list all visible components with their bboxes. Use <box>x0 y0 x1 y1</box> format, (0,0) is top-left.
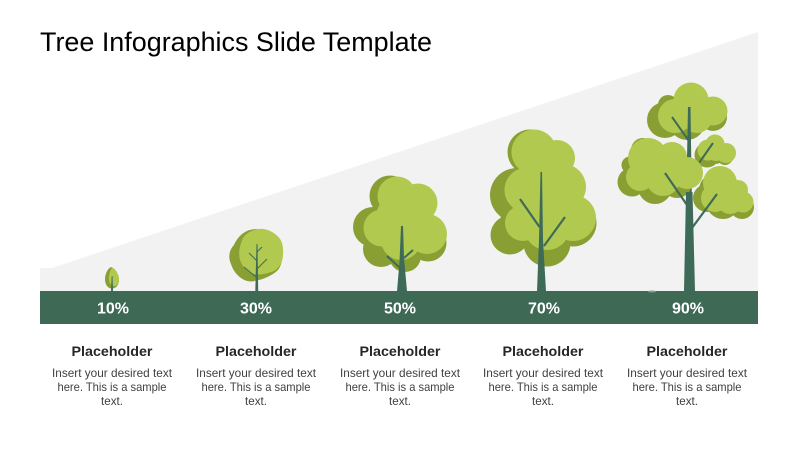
column 5: here. This is a sample <box>632 380 742 394</box>
tree 70%: large tree <box>490 130 596 291</box>
column 5 <box>627 300 748 408</box>
column 3: text. <box>389 394 411 408</box>
column 1 <box>52 300 173 408</box>
column 5: text. <box>676 394 698 408</box>
crown: lower right <box>693 166 754 219</box>
column 5: 90% <box>672 300 704 318</box>
title: Tree Infographics Slide Template <box>40 27 432 57</box>
column 3: here. This is a sample <box>346 380 455 394</box>
column 1: Placeholder <box>72 343 153 359</box>
column 5: Insert your desired text <box>627 366 748 380</box>
crown: top <box>647 82 728 140</box>
column 4: 70% <box>528 300 560 318</box>
column 1: 10% <box>97 300 129 318</box>
crown: large left <box>618 138 703 204</box>
column 3: Insert your desired text <box>340 366 461 380</box>
column 4: Insert your desired text <box>483 366 604 380</box>
tree 50%: medium tree <box>353 176 447 291</box>
column 2: text. <box>245 394 267 408</box>
column 2: Placeholder <box>216 343 297 359</box>
lower trunk and branches <box>665 173 717 291</box>
column 2 <box>196 300 317 408</box>
column 4: text. <box>532 394 554 408</box>
column 1: text. <box>101 394 123 408</box>
crown: small right <box>694 134 736 168</box>
column 4 <box>483 300 604 408</box>
column 3: Placeholder <box>360 343 441 359</box>
upper trunk and branches <box>672 107 713 210</box>
column 2: here. This is a sample <box>202 380 311 394</box>
column 4: here. This is a sample <box>488 380 598 394</box>
column 1: here. This is a sample <box>58 380 167 394</box>
column 1: Insert your desired text <box>52 366 173 380</box>
tree 90%: tallest multi-crown tree <box>618 82 754 291</box>
column 2: 30% <box>240 300 272 318</box>
column 4: Placeholder <box>502 343 584 359</box>
column 5: Placeholder <box>646 343 728 359</box>
tree 30%: young tree <box>229 229 283 291</box>
column 2: Insert your desired text <box>196 366 317 380</box>
tree 10%: sapling <box>105 267 119 291</box>
column 3 <box>340 300 461 408</box>
ground band <box>40 290 758 324</box>
rising grey background wedge <box>40 32 758 291</box>
column 3: 50% <box>384 300 416 318</box>
